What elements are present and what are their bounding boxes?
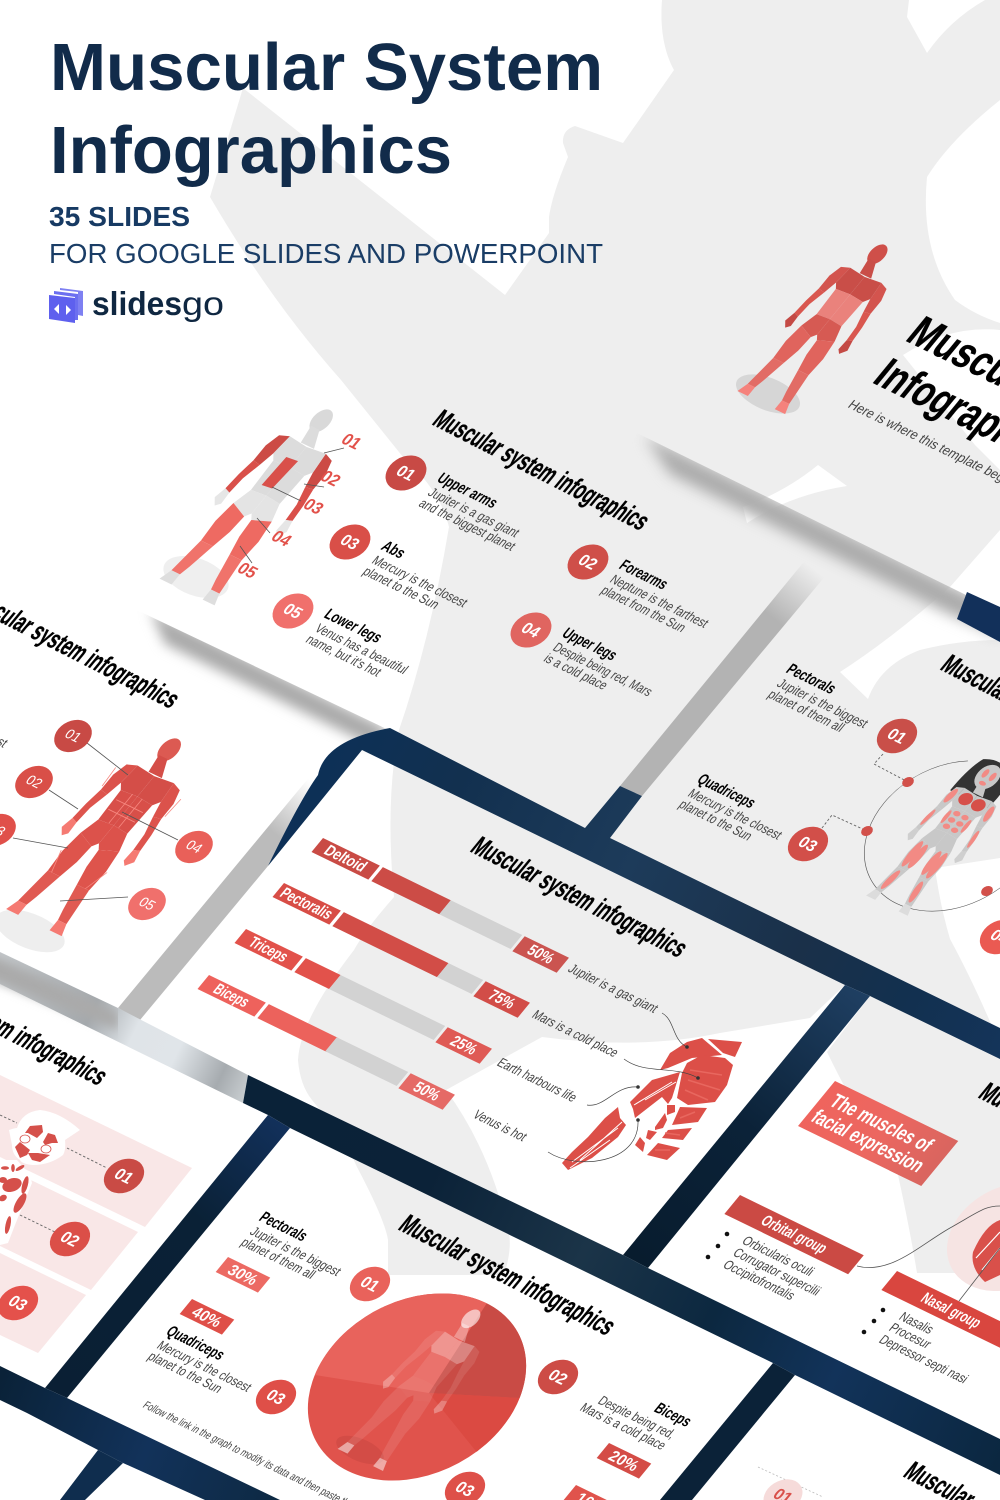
- gap: navy beside pie slide right: [660, 1363, 795, 1500]
- badge 02: [42, 1216, 98, 1262]
- item: lower legs: [301, 606, 423, 688]
- pink head circle: [921, 1165, 1000, 1309]
- item: upper legs: Upper legs: [558, 625, 621, 664]
- nasal list: Nasalis: [896, 1309, 938, 1337]
- pink band 1: [0, 1075, 192, 1227]
- item: forearms: Forearms: [615, 557, 672, 593]
- slide: facial expression: [706, 1077, 1000, 1386]
- badge 03: 03: [4, 1292, 31, 1314]
- bar row: biceps 50%: 50%: [409, 1079, 444, 1104]
- badge 02: 02: [574, 551, 601, 573]
- head: [9, 1110, 80, 1165]
- callout curves: [548, 1013, 698, 1162]
- item: abs: Abs: [377, 538, 409, 562]
- item: pectorals: planet of them all: [765, 687, 848, 735]
- bar row: triceps 25%: 25%: [446, 1033, 481, 1058]
- callout dots: [636, 1045, 700, 1122]
- value 40%: [179, 1299, 234, 1335]
- pink band 3: [0, 1253, 86, 1353]
- gap: navy band below bar slide: [243, 1075, 1000, 1475]
- heading box: The muscles of: [825, 1090, 938, 1157]
- gap: navy beside facial slide: [623, 985, 870, 1268]
- badge 03 left: [248, 1374, 304, 1420]
- item: upper arms: and the biggest planet: [416, 496, 519, 554]
- orbital bullets: [706, 1232, 729, 1259]
- badge 01: 01: [356, 1273, 383, 1295]
- gap: human and bar slides, grey part: [118, 740, 340, 1020]
- nasal group label: [881, 1271, 1000, 1350]
- caption: mars: Mars is a cold place: [529, 1007, 622, 1060]
- heading box: [798, 1081, 958, 1186]
- badge 01: 01: [883, 725, 910, 747]
- illustration: arm muscles: [562, 1038, 742, 1170]
- badge 05: 05: [136, 894, 160, 913]
- figure numbers: [233, 430, 366, 582]
- badge 04: 04: [517, 619, 544, 641]
- face muscles: [15, 1125, 58, 1162]
- item: quadriceps: [143, 1323, 267, 1406]
- bar row: deltoid 50%: [311, 838, 569, 973]
- bar row: triceps 25%: [234, 929, 492, 1064]
- item: quadriceps: [674, 771, 797, 853]
- item: biceps: Biceps: [650, 1400, 695, 1431]
- orbital list: [720, 1233, 824, 1303]
- figure: full muscles: [0, 724, 219, 940]
- slide: bottom right: [756, 1456, 1000, 1500]
- badge 05: 05: [279, 600, 306, 622]
- bar row: pectoralis 75%: 75%: [484, 987, 519, 1012]
- gap: navy beside pie slide left: [45, 1115, 290, 1398]
- value 40%: 40%: [187, 1304, 225, 1331]
- badge 03 bottom: [437, 1466, 493, 1500]
- body: [860, 757, 1000, 919]
- badge 01: [377, 450, 435, 496]
- badge 03: 03: [794, 833, 821, 855]
- badge 01: 01: [110, 1165, 137, 1187]
- bar row: biceps 50%: Biceps: [209, 981, 253, 1011]
- value 20%: 20%: [604, 1448, 642, 1475]
- callout lines: [13, 743, 178, 901]
- orbital group label: [724, 1195, 864, 1274]
- value 30%: [215, 1257, 270, 1293]
- item: pectorals: Jupiter is the biggest: [247, 1224, 345, 1279]
- figure shadow: [330, 1430, 390, 1470]
- slide: pink bands facial muscles: [0, 959, 192, 1353]
- figure shadow: [727, 366, 809, 422]
- pink band 2: [0, 1165, 138, 1290]
- item: upper legs: Despite being red, Mars: [550, 640, 656, 699]
- gap: navy corner below cover slide: [957, 592, 1000, 642]
- nasal list: Procesur: [886, 1320, 935, 1352]
- bar row: pectoralis 75%: Pectoralis: [276, 885, 337, 923]
- torso muscles: [0, 1164, 30, 1234]
- item: lower legs: Lower legs: [320, 606, 386, 647]
- title: Muscular system infographics: [393, 1209, 622, 1341]
- item: biceps: Mars is a cold place: [577, 1400, 670, 1453]
- heading: Muscular System: [50, 30, 603, 105]
- badge 01: [96, 1153, 152, 1199]
- heading: [50, 30, 603, 188]
- title block: [49, 30, 603, 269]
- item: pectorals: [763, 661, 883, 742]
- subtitle: platforms: FOR GOOGLE SLIDES AND POWERPOINT: [49, 238, 603, 269]
- badge 02: [559, 539, 617, 585]
- item: quadriceps: planet to the Sun: [145, 1349, 226, 1396]
- item: quadriceps: Quadriceps: [693, 771, 759, 812]
- item: abs: [358, 538, 483, 621]
- badge 01: [342, 1261, 398, 1307]
- connector curve: [857, 1206, 1000, 1268]
- pie base sector: [263, 1262, 571, 1500]
- cover slide: [727, 232, 1000, 491]
- badge 01: [46, 714, 100, 758]
- gap: navy band below pie slide: [0, 1366, 280, 1500]
- slide: pectorals figure ring: [674, 649, 1000, 960]
- subtitle: slide count: 35 SLIDES: [49, 201, 190, 232]
- gap: pale band below human slide: [0, 952, 248, 1103]
- bar row: triceps 25%: Triceps: [245, 934, 292, 966]
- item: pectorals: Pectorals: [255, 1209, 311, 1245]
- figure: white muscle outline: [331, 1298, 512, 1474]
- heading box: facial expression: [806, 1106, 929, 1177]
- item: pectorals: Pectorals: [782, 661, 840, 698]
- badge 03 bottom: 03: [451, 1478, 478, 1500]
- badge 02: 02: [56, 1228, 83, 1250]
- orbital group label: Orbital group: [757, 1213, 831, 1257]
- badge 02: [530, 1354, 586, 1400]
- badge 01: [869, 713, 925, 759]
- item: upper arms: Jupiter is a gas giant: [425, 485, 523, 540]
- badge 03: [0, 1280, 46, 1326]
- title: Muscular system infographics: [465, 831, 694, 963]
- orbital list: Occipitofrontalis: [720, 1257, 799, 1303]
- dashed connectors: [0, 1115, 107, 1232]
- badge 01: 01: [62, 726, 86, 745]
- nasal list: Depressor septi nasi: [876, 1332, 972, 1386]
- grey human silhouette background: [210, 0, 1000, 1275]
- orbital list: Orbicularis oculi: [739, 1233, 818, 1279]
- body: [0, 724, 219, 940]
- gap: navy band above bar slide: [268, 728, 1000, 1059]
- heading: Infographics: [50, 113, 452, 188]
- connector line: [959, 1248, 1000, 1301]
- figure: female muscles: [860, 751, 1000, 919]
- body silhouette: [0, 1160, 32, 1245]
- figure numbers: 04: [267, 527, 296, 550]
- wordmark: go: [182, 285, 224, 322]
- figure: back view muscles: [730, 232, 920, 418]
- item: upper arms: Upper arms: [433, 470, 501, 512]
- muscle fibres: [570, 1075, 680, 1168]
- pie chart: [308, 1294, 526, 1480]
- bar row: pectoralis 75%: [272, 883, 530, 1018]
- figure: face and torso muscles: [0, 1110, 80, 1245]
- badge 04: [502, 607, 560, 653]
- item: pectorals: Jupiter is the biggest: [774, 676, 872, 731]
- caption: earth: Earth harbours life: [494, 1055, 581, 1105]
- shadow below list slide: [150, 610, 390, 746]
- shadow below cover slide: [645, 436, 1000, 636]
- value 30%: 30%: [223, 1262, 261, 1289]
- badge 01: 01: [392, 462, 419, 484]
- slide: pie chart: [140, 1209, 695, 1500]
- badge 02: 02: [544, 1366, 571, 1388]
- badge 05: [120, 882, 174, 926]
- caption: jupiter: Jupiter is a gas giant: [565, 961, 662, 1016]
- cover title: [864, 309, 1000, 476]
- dashed top rule: [758, 1467, 823, 1497]
- badge 03 left: 03: [262, 1386, 289, 1408]
- item: forearms: Neptune is the farthest: [607, 572, 712, 631]
- item: lower legs: Venus has a beautiful: [312, 621, 412, 677]
- face: [969, 761, 1000, 793]
- slide: bar chart: [197, 831, 742, 1170]
- gap: list and pectorals slides, grey part: [620, 558, 832, 796]
- dashed connectors: [822, 754, 908, 831]
- figure numbers: 05: [233, 559, 262, 582]
- figure shadow: [0, 901, 74, 961]
- value 20%: [596, 1443, 651, 1479]
- muscles: [870, 761, 1000, 908]
- item: abs: Mercury is the closest: [369, 553, 471, 610]
- gap: navy bottom-left column: [60, 1450, 123, 1500]
- figure numbers: 03: [299, 495, 328, 518]
- item: quadriceps: Quadriceps: [162, 1323, 228, 1364]
- nasal bullets: [862, 1308, 885, 1334]
- item: quadriceps: Mercury is the closest: [685, 786, 786, 842]
- pie sectors: [314, 1294, 526, 1452]
- item: upper arms: [414, 470, 540, 554]
- badge 03: [780, 821, 836, 867]
- item: lower legs: name, but it's hot: [303, 632, 385, 679]
- orbital list: Corrugator supercilii: [730, 1245, 824, 1298]
- slide: five muscle areas list: [151, 395, 724, 710]
- badge 03: [321, 519, 379, 565]
- item: forearms: planet from the Sun: [598, 583, 689, 635]
- badge 04: [972, 914, 1000, 960]
- shadow below human slide: [0, 950, 118, 1030]
- figure: highlighted muscles: [151, 395, 371, 610]
- item: upper legs: is a cold place: [541, 651, 611, 693]
- white cut-outs in silhouette: [743, 0, 1000, 1045]
- logo: slidesgo: [49, 285, 224, 323]
- bar row: deltoid 50%: 50%: [523, 942, 558, 967]
- hair: [950, 753, 1000, 809]
- value 10%: [563, 1485, 618, 1500]
- badge 04: [167, 825, 221, 869]
- figure shadow: [153, 547, 239, 607]
- bar row: deltoid 50%: Deltoid: [320, 843, 370, 875]
- item: quadriceps: planet to the Sun: [676, 797, 756, 843]
- figure numbers: 02: [316, 467, 345, 490]
- ring nodes: [859, 775, 995, 898]
- abs lines: [36, 767, 181, 896]
- item: quadriceps: Mercury is the closest: [154, 1338, 255, 1395]
- badge 02: 02: [23, 772, 47, 791]
- item: biceps: Despite being red,: [595, 1393, 679, 1441]
- badge 03: 03: [336, 531, 363, 553]
- badge 05: [264, 588, 322, 634]
- wordmark: slides: [92, 285, 182, 322]
- eyes: [20, 1135, 51, 1153]
- badge 02: [7, 760, 61, 804]
- abs highlight: [262, 455, 298, 491]
- title: Muscular system infographics: [427, 404, 656, 536]
- chest muscles: [955, 791, 989, 814]
- item: abs: planet to the Sun: [360, 564, 443, 612]
- figure callout lines: [240, 448, 344, 563]
- figure numbers: 01: [337, 430, 366, 453]
- ring around figure: [829, 735, 1000, 937]
- face muscle illustration: [972, 1220, 1000, 1282]
- bar row: biceps 50%: [197, 975, 455, 1110]
- item: pectorals: planet of them all: [238, 1235, 319, 1282]
- badge 03: [0, 808, 24, 852]
- badge 01: [756, 1474, 810, 1500]
- item: pectorals: [236, 1209, 356, 1290]
- nasal list: [876, 1309, 972, 1386]
- badge 04: 04: [183, 837, 207, 856]
- caption: venus: Venus is hot: [470, 1107, 531, 1144]
- icon: stacked slides: [49, 288, 83, 323]
- slide: human figure callouts: [0, 582, 221, 961]
